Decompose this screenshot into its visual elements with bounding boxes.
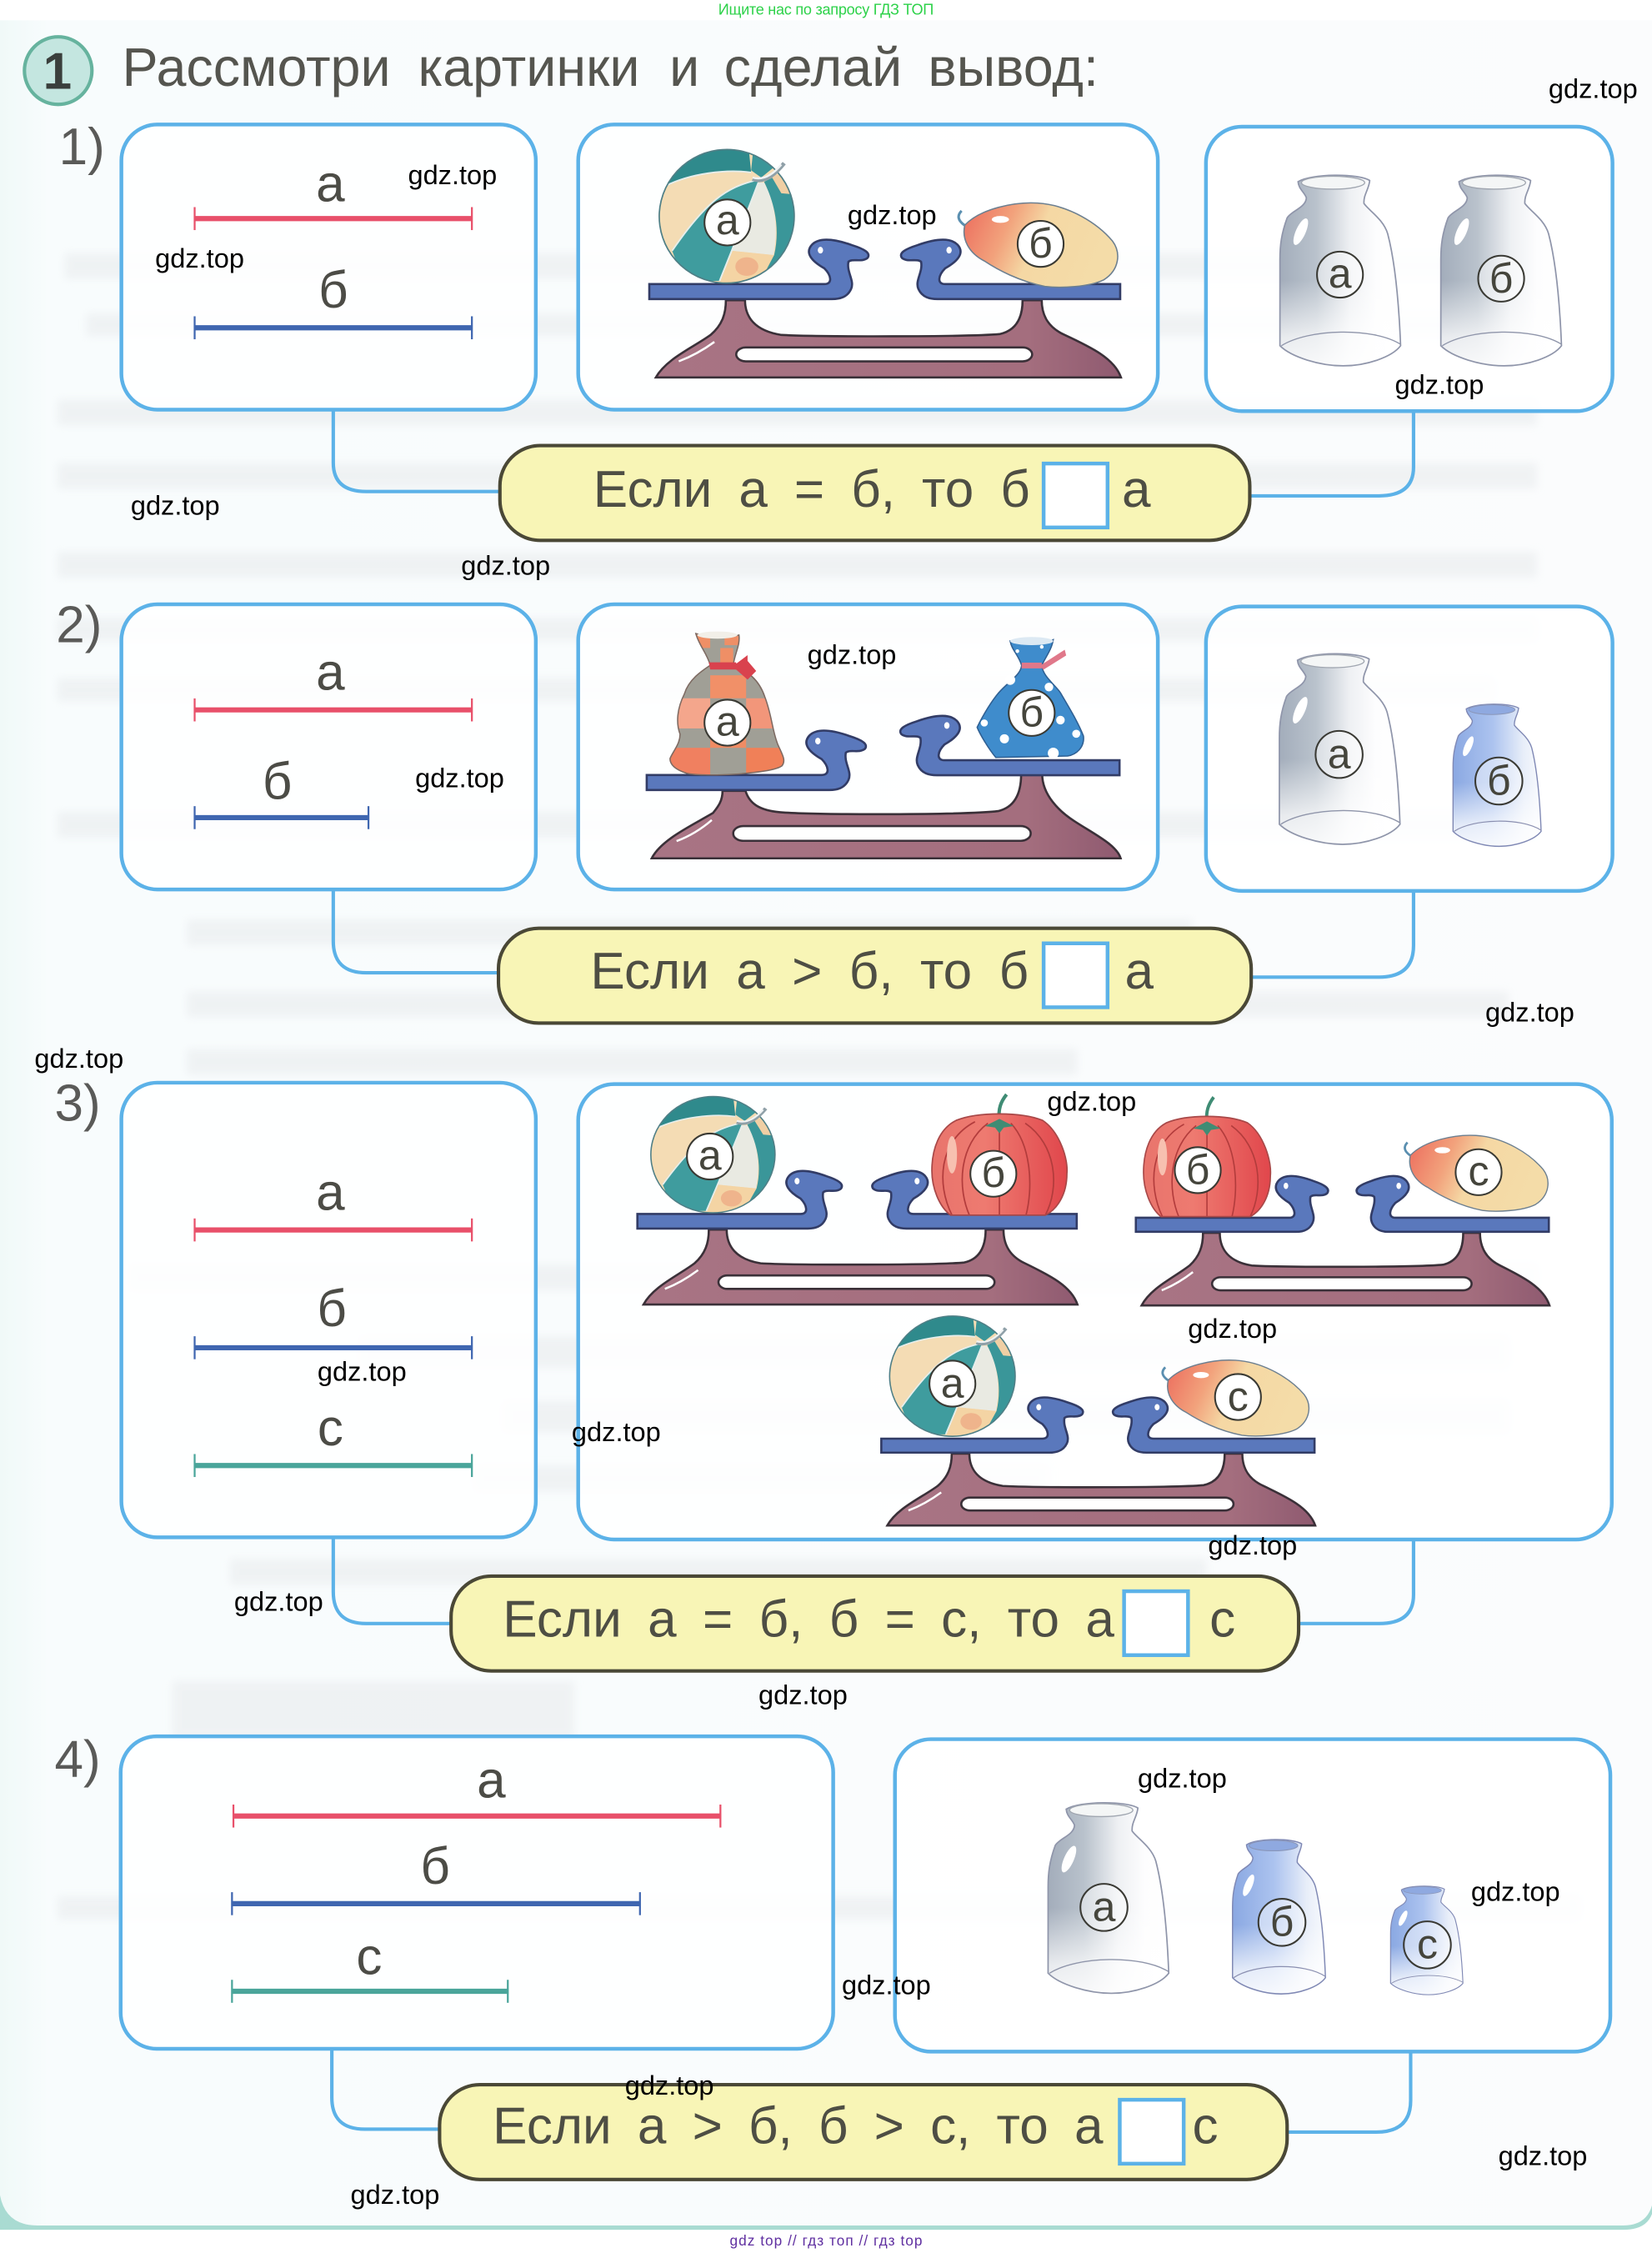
title text: картинки — [418, 37, 639, 98]
row number: 1) — [59, 118, 105, 176]
conclusion: а — [1124, 943, 1154, 1000]
connectors — [333, 889, 1414, 977]
row 4 — [54, 1730, 1610, 2180]
watermarks: gdz.top — [842, 1970, 931, 2000]
title — [24, 37, 1099, 104]
panel: three balance scales — [578, 1079, 1612, 1540]
conclusion: Если а > б, б > с, то а — [493, 2098, 1104, 2155]
row number: 2) — [56, 597, 102, 654]
conclusion: с — [1209, 1590, 1235, 1648]
icon: patchwork bag — [669, 632, 785, 775]
panel: segments: с — [318, 1399, 343, 1457]
exercise number badge: 1 — [43, 43, 72, 100]
panel: jars: б — [1270, 1899, 1294, 1945]
scale: ball and mango: а — [941, 1359, 964, 1406]
panel: jars — [1206, 607, 1613, 891]
watermarks: gdz.top — [234, 1586, 323, 1616]
scale: pumpkin and mango — [1136, 1097, 1549, 1305]
connectors — [333, 1537, 1414, 1624]
scale: ball and pumpkin: а — [698, 1132, 722, 1179]
watermarks: gdz.top — [1499, 2141, 1587, 2171]
panel: segments: б — [317, 1280, 347, 1338]
scale: ball and mango — [872, 1299, 1315, 1525]
conclusion: Если а = б, то б — [593, 461, 1030, 518]
panel: segments: б — [420, 1838, 450, 1895]
panel: balance scale with ball and mango: а — [716, 197, 739, 243]
watermarks: gdz.top — [572, 1417, 661, 1447]
watermarks: gdz.top — [34, 1044, 123, 1074]
watermarks: gdz.top — [415, 764, 504, 794]
title text: сделай — [724, 37, 902, 98]
panel: segments — [122, 604, 536, 889]
watermarks: gdz.top — [1138, 1763, 1227, 1793]
panel: segments: а — [477, 1751, 506, 1809]
watermarks: gdz.top — [1188, 1314, 1277, 1344]
conclusion — [439, 2085, 1287, 2180]
panel: segments: а — [316, 644, 345, 702]
conclusion — [451, 1576, 1299, 1671]
connectors — [332, 2049, 1410, 2132]
panel: balance scale with ball and mango — [578, 124, 1158, 409]
watermarks: gdz.top — [318, 1357, 407, 1387]
watermarks: gdz.top — [1047, 1087, 1136, 1117]
panel: segments: б — [263, 754, 292, 811]
top note: Ищите нас по запросу ГДЗ ТОП — [718, 2, 934, 18]
title text: и — [669, 37, 699, 98]
title text: Рассмотри — [122, 37, 391, 98]
panel: segments: а — [316, 156, 345, 213]
row 3 — [54, 1075, 1612, 1671]
panel: tilted scale with bags: а — [716, 698, 739, 745]
watermarks: gdz.top — [758, 1680, 848, 1710]
panel: tilted scale with bags — [578, 604, 1158, 889]
connectors — [333, 409, 1414, 496]
panel: jars — [1206, 127, 1613, 411]
watermarks: gdz.top — [1549, 73, 1638, 103]
row 1 — [59, 118, 1613, 540]
scale: pumpkin and mango: б — [1186, 1146, 1209, 1193]
panel: jars: а — [1093, 1884, 1116, 1930]
scale: ball and pumpkin — [633, 1079, 1078, 1304]
panel: jars: б — [1489, 255, 1513, 302]
watermarks: gdz.top — [1485, 998, 1574, 1028]
panel: segments — [122, 124, 536, 409]
conclusion — [500, 446, 1249, 540]
scale: ball and mango: с — [1228, 1374, 1249, 1420]
row number: 3) — [54, 1075, 101, 1133]
watermarks: gdz.top — [848, 200, 937, 230]
watermarks: gdz.top — [131, 490, 220, 520]
conclusion: Если а = б, б = с, то а — [503, 1590, 1114, 1648]
watermarks: gdz.top — [1208, 1530, 1297, 1560]
watermarks: gdz.top — [808, 640, 896, 670]
conclusion — [498, 929, 1251, 1023]
watermarks: gdz.top — [1394, 370, 1484, 400]
panel: jars — [895, 1740, 1610, 2051]
panel: jars: б — [1487, 757, 1511, 804]
panel: tilted scale with bags: б — [1019, 689, 1044, 736]
bottom note: gdz top // гдз топ // гдз top — [730, 2232, 922, 2249]
watermarks: gdz.top — [1471, 1876, 1560, 1906]
panel: segments — [121, 1736, 834, 2049]
scale: pumpkin and mango: с — [1468, 1148, 1489, 1194]
panel: segments: а — [316, 1164, 345, 1221]
panel: segments: б — [318, 262, 348, 319]
watermarks: gdz.top — [351, 2180, 439, 2210]
watermarks: gdz.top — [155, 243, 244, 273]
watermarks: gdz.top — [625, 2070, 714, 2100]
conclusion: а — [1122, 461, 1151, 518]
watermarks: gdz.top — [461, 551, 550, 581]
panel: jars: а — [1328, 730, 1351, 777]
watermarks: gdz.top — [408, 160, 497, 190]
conclusion: Если а > б, то б — [590, 943, 1029, 1000]
exercise number badge — [24, 37, 92, 104]
icon: polka-dot bag — [977, 637, 1084, 759]
row number: 4) — [54, 1730, 101, 1788]
title text: вывод: — [928, 37, 1099, 98]
scale: ball and pumpkin: б — [981, 1149, 1005, 1196]
row 2 — [56, 597, 1613, 1023]
panel: jars: а — [1329, 250, 1352, 297]
panel: balance scale with ball and mango: б — [1029, 220, 1053, 267]
panel: jars: с — [1417, 1920, 1438, 1967]
panel: segments — [122, 1083, 536, 1537]
panel: segments: с — [356, 1928, 382, 1985]
conclusion: с — [1192, 2098, 1219, 2155]
